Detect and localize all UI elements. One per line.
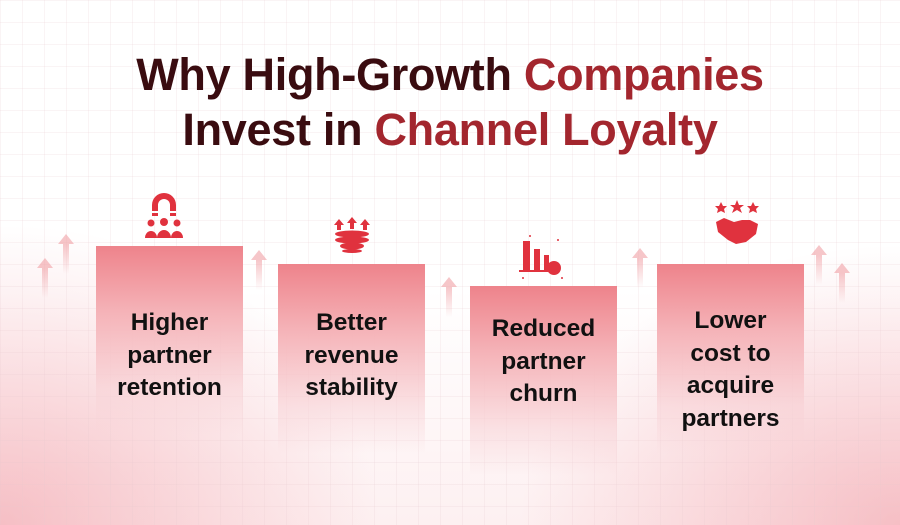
title <box>136 49 764 155</box>
box: higher partner retention: Higher <box>131 309 208 336</box>
box: better revenue stability: Better <box>316 309 387 336</box>
icon: handshake stars <box>715 200 759 244</box>
box: higher partner retention: partner <box>127 342 212 368</box>
box: higher partner retention <box>96 246 243 436</box>
icon: magnet people <box>145 193 183 238</box>
box: lower cost to acquire partners: partners <box>681 404 780 432</box>
box: reduced partner churn: churn <box>509 380 578 407</box>
icon: declining bars <box>519 235 563 279</box>
title: Why High-Growth Companies <box>136 49 764 100</box>
box: better revenue stability <box>278 264 425 454</box>
box: higher partner retention: retention <box>117 374 222 401</box>
box: lower cost to acquire partners: cost to <box>690 340 771 366</box>
box: reduced partner churn: partner <box>501 348 586 374</box>
box: lower cost to acquire partners: Lower <box>694 307 767 334</box>
decorative arrows <box>37 234 850 312</box>
icon: coins with arrows <box>334 217 370 253</box>
title: Invest in Channel Loyalty <box>182 104 718 155</box>
box: lower cost to acquire partners <box>657 264 804 454</box>
box: better revenue stability: revenue <box>305 342 398 368</box>
box: better revenue stability: stability <box>305 374 398 401</box>
box: reduced partner churn <box>470 286 617 476</box>
box: reduced partner churn: Reduced <box>492 315 595 342</box>
box: lower cost to acquire partners: acquire <box>687 372 774 399</box>
